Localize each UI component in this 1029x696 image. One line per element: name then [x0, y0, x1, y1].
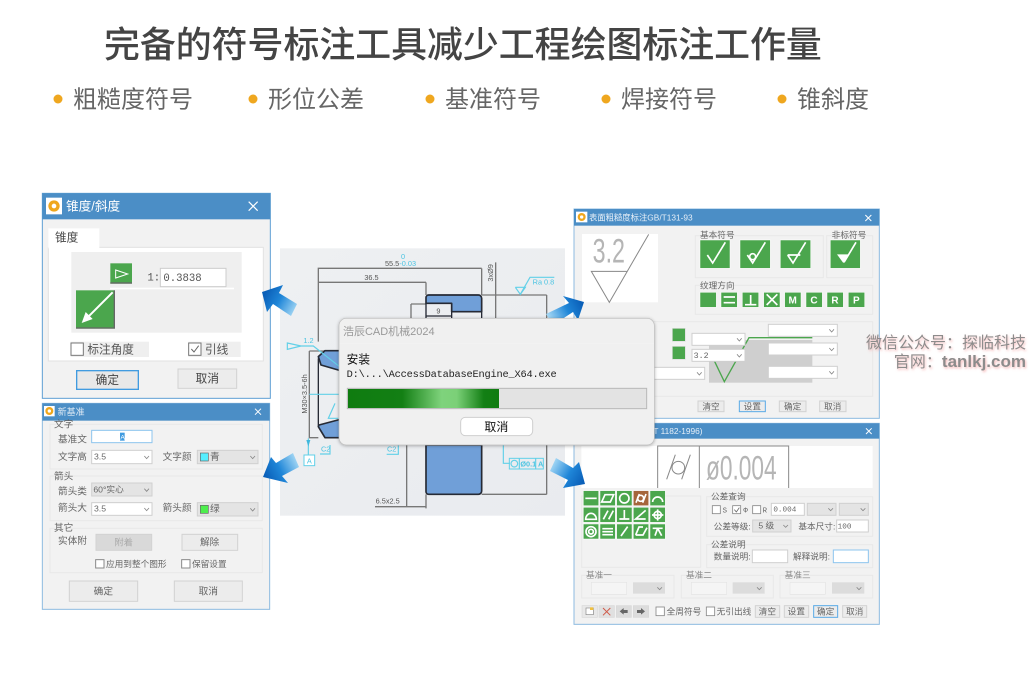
panel: datum dialog: A: [120, 435, 125, 442]
panel: datum dialog: 附着: [114, 537, 133, 548]
panel: taper dialog: 0.3838: [163, 273, 202, 285]
panel: datum dialog: 基准文: [58, 434, 87, 446]
feature list: [54, 86, 869, 114]
panel: geometric tolerance dialog: 全周符号: [667, 605, 702, 616]
panel: surface roughness dialog: 取消: [824, 401, 842, 412]
panel: geometric tolerance dialog: 5 级: [758, 520, 775, 531]
panel: surface roughness dialog: 设置: [744, 402, 761, 412]
panel: surface roughness dialog: 确定: [784, 401, 802, 412]
panel: taper dialog: 引线: [205, 342, 229, 356]
panel: surface roughness dialog: 基本符号: [700, 229, 735, 240]
panel: taper dialog: 确定: [96, 373, 119, 387]
panel: geometric tolerance dialog: 基准一: [586, 569, 612, 580]
panel: surface roughness dialog: 3.2: [593, 232, 625, 270]
panel: datum dialog: 确定: [94, 585, 113, 597]
panel: datum dialog: 保留设置: [192, 558, 227, 569]
panel: taper dialog: [42, 193, 270, 398]
panel: geometric tolerance dialog: 100: [838, 523, 852, 531]
technical drawing: 3xØ9: [486, 264, 495, 282]
panel: geometric tolerance dialog: 取消: [846, 605, 864, 616]
technical drawing: 36.5: [364, 273, 379, 282]
technical drawing: A: [307, 456, 312, 465]
bullet: 锥斜度: 锥斜度: [797, 86, 869, 114]
panel: surface roughness dialog: 表面粗糙度标注GB/T131-93: [589, 213, 693, 223]
panel: geometric tolerance dialog: 清空: [759, 605, 776, 616]
technical drawing: C2: [321, 445, 330, 454]
panel: datum dialog: 取消: [199, 585, 218, 597]
panel: geometric tolerance dialog: 数量说明:: [714, 551, 751, 562]
bullet: 焊接符号: 焊接符号: [621, 86, 717, 114]
panel: datum dialog: 箭头类: [58, 485, 87, 497]
panel: geometric tolerance dialog: [574, 423, 879, 624]
panel: datum dialog: 应用到整个图形: [106, 558, 167, 569]
panel: geometric tolerance dialog: 设置: [788, 606, 805, 616]
cancel button: 取消: [484, 420, 508, 434]
panel: surface roughness dialog: 非标符号: [832, 229, 867, 240]
arrow: to roughness dialog: [546, 296, 584, 325]
panel: geometric tolerance dialog: 无引出线: [717, 605, 752, 616]
panel: datum dialog: 实体附: [58, 535, 87, 547]
arrow: to taper dialog: [262, 285, 297, 316]
panel: surface roughness dialog: R: [831, 295, 839, 306]
technical drawing: [280, 248, 565, 516]
technical drawing: Ø0.1 A: [520, 459, 544, 468]
panel: datum dialog: [42, 403, 270, 609]
panel: datum dialog: 60°实心: [93, 484, 124, 495]
panel: datum dialog: 3.5: [94, 504, 106, 514]
gear section: [426, 295, 482, 312]
technical drawing: -0.03: [399, 259, 416, 268]
panel: datum dialog: 文字: [54, 419, 73, 431]
panel: geometric tolerance dialog: 基准二: [686, 569, 712, 580]
technical drawing: 0: [401, 252, 405, 261]
panel: datum dialog: 文字高: [58, 451, 87, 463]
title: 完备的符号标注工具减少工程绘图标注工作量: [104, 25, 822, 65]
technical drawing: 1.2: [303, 336, 314, 345]
technical drawing: C2: [387, 445, 396, 454]
panel: geometric tolerance dialog: 确定: [817, 605, 835, 616]
panel: datum dialog: 绿: [210, 503, 220, 515]
panel: geometric tolerance dialog: 基本尺寸:: [798, 520, 835, 531]
panel: datum dialog: 箭头颜: [163, 502, 192, 514]
arrow: to tolerance dialog: [550, 458, 585, 488]
panel: geometric tolerance dialog: ø0.004: [706, 449, 777, 487]
panel: datum dialog: 3.5: [94, 452, 106, 462]
panel: datum dialog: 青: [210, 451, 220, 463]
panel: taper dialog: 锥度: [55, 231, 79, 245]
technical drawing: 9: [436, 307, 440, 316]
cancel button: [461, 417, 533, 436]
panel: geometric tolerance dialog: 公差查询: [711, 490, 746, 501]
panel: surface roughness dialog: 3.2: [694, 351, 709, 361]
panel: datum dialog: 文字颜: [163, 451, 192, 463]
panel: geometric tolerance dialog: 0.004: [773, 507, 797, 515]
watermark: 官网：tanlkj.com: [894, 352, 1026, 371]
install progress dialog: D:\...\AccessDatabaseEngine_X64.exe: [347, 369, 557, 381]
panel: taper dialog: 取消: [196, 371, 219, 385]
panel: geometric tolerance dialog: 解释说明:: [793, 551, 830, 562]
panel: geometric tolerance dialog: S: [723, 507, 728, 515]
panel: surface roughness dialog: 纹理方向: [700, 279, 735, 290]
technical drawing: M30×3.5-6h: [300, 374, 309, 414]
panel: surface roughness dialog: C: [810, 295, 818, 306]
panel: taper dialog: 锥度/斜度: [66, 199, 120, 214]
panel: datum dialog: 新基准: [58, 406, 85, 417]
install progress dialog: 浩辰CAD机械2024: [343, 324, 435, 338]
arrow: to datum dialog: [263, 453, 299, 483]
panel: datum dialog: 箭头: [54, 470, 74, 482]
technical drawing: Ra 0.8: [533, 277, 554, 286]
panel: surface roughness dialog: 清空: [702, 401, 720, 412]
panel: taper dialog: 标注角度: [87, 342, 134, 356]
panel: datum dialog: 其它: [54, 522, 73, 534]
panel: geometric tolerance dialog: Φ: [743, 507, 748, 515]
panel: geometric tolerance dialog: 基准三: [785, 569, 811, 580]
watermark: [866, 334, 1026, 371]
panel: taper dialog: 1:: [147, 273, 160, 285]
progress bar: [347, 388, 647, 409]
bullet: 基准符号: 基准符号: [445, 86, 541, 114]
install progress dialog: 安装: [347, 352, 370, 366]
panel: datum dialog: 箭头大: [58, 502, 87, 514]
panel: surface roughness dialog: [574, 209, 879, 418]
bullet: 粗糙度符号: 粗糙度符号: [73, 86, 193, 114]
bullet: 形位公差: 形位公差: [268, 86, 364, 114]
panel: surface roughness dialog: M: [789, 295, 797, 306]
panel: surface roughness dialog: P: [853, 295, 860, 306]
tolerance symbol grid: [583, 491, 665, 539]
panel: geometric tolerance dialog: 公差等级:: [714, 520, 751, 531]
watermark: 微信公众号：探临科技: [866, 334, 1026, 352]
install progress dialog: [339, 318, 654, 445]
panel: geometric tolerance dialog: 公差说明: [711, 538, 746, 549]
panel: datum dialog: 解除: [200, 537, 220, 549]
technical drawing: 6.5x2.5: [376, 497, 400, 506]
technical drawing: 55.5: [385, 259, 399, 268]
panel: geometric tolerance dialog: T 1182-1996): [653, 426, 703, 436]
panel: geometric tolerance dialog: R: [763, 507, 768, 515]
